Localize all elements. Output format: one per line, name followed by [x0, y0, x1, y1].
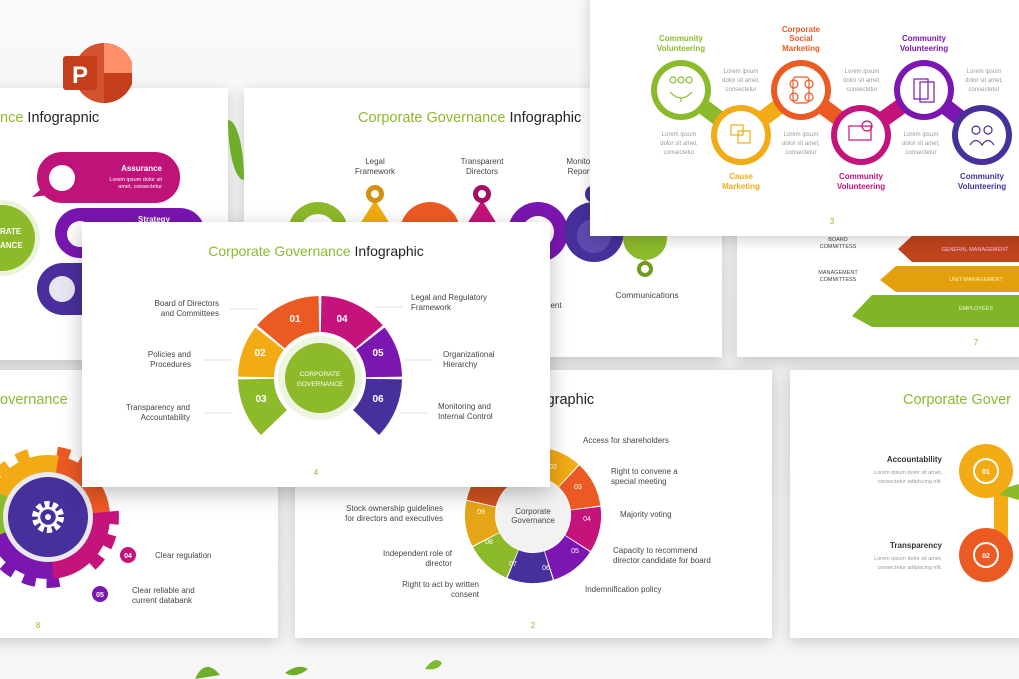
item: accountability: Accountability — [887, 455, 943, 464]
arrow: general management — [898, 236, 1019, 262]
item 05: 05 — [96, 592, 104, 599]
bubble: assurance: Assurance — [121, 164, 163, 173]
left labels: Right to act by written — [402, 580, 479, 589]
icon: powerpoint logo — [63, 43, 132, 103]
arrow: general management: GENERAL MANAGEMENT — [941, 247, 1009, 253]
item: accountability: consectetur adipiscing elit. — [877, 479, 942, 485]
right labels: Indemnification policy — [585, 585, 661, 594]
ring chart — [458, 440, 608, 590]
right labels: Internal Control — [438, 412, 493, 421]
labels: MANAGEMENT — [818, 270, 858, 276]
bubble: assurance: Lorem ipsum dolor sit — [109, 177, 162, 183]
labels: Legal — [365, 157, 385, 166]
half donut chart: 02 — [254, 348, 266, 359]
item: transparency: Lorem ipsum dolor sit amet, — [874, 556, 942, 562]
item: transparency: consectetur adipiscing elit. — [877, 565, 942, 571]
titles: Marketing — [782, 44, 820, 53]
titles: Cause — [729, 172, 754, 181]
half donut chart: GOVERNANCE — [297, 381, 344, 388]
lorem texts — [660, 69, 1003, 156]
ring numbers: 04 — [583, 516, 591, 523]
half donut chart: 06 — [372, 394, 384, 405]
chain shapes — [288, 185, 672, 277]
arrow: unit management — [880, 266, 1019, 292]
connector — [990, 480, 1019, 545]
titles: Community — [839, 172, 884, 181]
lorem texts: Lorem ipsum — [845, 69, 879, 75]
left labels: for directors and executives — [345, 514, 443, 523]
circle: corporate governance: ANCE — [0, 241, 23, 250]
ring numbers: 09 — [477, 509, 485, 516]
titles: Community — [659, 34, 704, 43]
left labels: Accountability — [141, 413, 190, 422]
half donut chart — [238, 296, 402, 435]
icons — [670, 77, 994, 145]
right labels — [583, 436, 711, 594]
right labels: Hierarchy — [443, 360, 477, 369]
right labels: Monitoring and — [438, 402, 491, 411]
left labels: Policies and — [148, 350, 191, 359]
lorem texts: Lorem ipsum — [904, 132, 938, 138]
ring numbers: 06 — [542, 565, 550, 572]
ring center text: Governance — [511, 516, 555, 525]
half donut chart: 05 — [372, 348, 384, 359]
slide: main slide 4 — [82, 222, 550, 487]
half donut chart: 04 — [336, 314, 348, 325]
ring numbers — [477, 464, 591, 572]
ring numbers: 07 — [509, 561, 517, 568]
lorem texts: consectetur — [846, 87, 878, 93]
circle 01: 01 — [982, 469, 990, 476]
circles — [651, 60, 1012, 165]
circle: corporate governance — [0, 200, 40, 276]
ring center text — [511, 507, 555, 525]
titles: Volunteering — [837, 182, 885, 191]
lorem texts: dolor sit amet, — [965, 78, 1003, 84]
title: nce Infographic — [495, 392, 594, 408]
lorem texts: dolor sit amet, — [660, 141, 698, 147]
titles: Social — [789, 34, 813, 43]
leaves: bottom — [195, 660, 442, 679]
title: nce Infograpnic — [0, 110, 99, 126]
right labels: Access for shareholders — [583, 436, 669, 445]
labels — [818, 237, 858, 283]
item 04: 04 — [124, 553, 132, 560]
lorem texts: Lorem ipsum — [662, 132, 696, 138]
titles: Marketing — [722, 182, 760, 191]
half donut chart: CORPORATE — [300, 371, 341, 378]
labels: Directors — [466, 167, 498, 176]
slide: left assurance slide — [0, 88, 228, 360]
left labels: Board of Directors — [155, 299, 219, 308]
ring numbers: 03 — [574, 484, 582, 491]
title: Corporate Gover — [903, 392, 1011, 408]
left labels: Procedures — [150, 360, 191, 369]
circle 02 — [959, 528, 1013, 582]
left labels: and Committees — [161, 309, 219, 318]
lorem texts: consectetur — [785, 150, 817, 156]
ring center text: Corporate — [515, 507, 551, 516]
half donut chart: 03 — [255, 394, 267, 405]
circle 02: 02 — [982, 553, 990, 560]
titles: Community — [902, 34, 947, 43]
title: Corporate Governance Infographic — [358, 110, 581, 126]
connector lines — [204, 307, 433, 413]
item: transparency: Transparency — [890, 541, 943, 550]
right labels: Organizational — [443, 350, 495, 359]
lorem texts: dolor sit amet, — [902, 141, 940, 147]
right labels: Legal and Regulatory — [411, 293, 487, 302]
lorem texts: dolor sit amet, — [843, 78, 881, 84]
lorem texts: consectetur — [663, 150, 695, 156]
title: Corporate Governance Infographic — [208, 243, 424, 259]
labels: COMMITTESS — [820, 277, 857, 283]
left labels: Independent role of — [383, 549, 453, 558]
item 04 — [120, 547, 211, 563]
page number: 3 — [830, 217, 835, 226]
slide: right accountability slide — [790, 370, 1019, 638]
right labels: Majority voting — [620, 510, 672, 519]
labels: Transparent — [461, 157, 504, 166]
lorem texts: Lorem ipsum — [967, 69, 1001, 75]
right labels — [411, 293, 495, 421]
labels: Framework — [355, 167, 396, 176]
page number: 7 — [974, 338, 979, 347]
right labels: director candidate for board — [613, 556, 711, 565]
left labels: Transparency and — [126, 403, 190, 412]
right labels: Capacity to recommend — [613, 546, 697, 555]
lorem texts: consectetur — [725, 87, 757, 93]
arrow: employees — [852, 295, 1019, 327]
item: transparency — [874, 541, 943, 571]
item 05: current databank — [132, 596, 193, 605]
right labels: Right to convene a — [611, 467, 678, 476]
left labels: director — [425, 559, 452, 568]
titles: Volunteering — [958, 182, 1006, 191]
item: accountability: Lorem ipsum dolor sit amet, — [874, 470, 942, 476]
half donut chart: 01 — [289, 314, 301, 325]
bubble: assurance — [32, 152, 180, 203]
left labels — [126, 299, 219, 422]
left labels: consent — [451, 590, 480, 599]
left labels — [345, 504, 480, 599]
slide: chain infographic (top middle) — [244, 88, 722, 357]
titles: Corporate — [782, 25, 821, 34]
arrow: employees: EMPLOYEES — [959, 306, 993, 312]
label: communications: Communications — [615, 290, 679, 300]
labels: COMMITTESS — [820, 244, 857, 250]
slide: gear slide 8 — [0, 370, 278, 638]
label: partial: ent — [550, 301, 562, 310]
right labels: special meeting — [611, 477, 667, 486]
item: accountability — [874, 455, 943, 485]
ring numbers: 08 — [485, 539, 493, 546]
bubble: assurance: amet, consectetur — [118, 184, 162, 190]
lorem texts: consectetur — [905, 150, 937, 156]
titles: Volunteering — [657, 44, 705, 53]
page number: 2 — [531, 621, 536, 630]
page number: 8 — [36, 621, 41, 630]
labels — [355, 157, 604, 176]
labels: Monitoring — [566, 157, 604, 166]
lorem texts: consectetur — [968, 87, 1000, 93]
connectors — [681, 90, 982, 135]
bubble: third — [37, 263, 137, 315]
arrow: unit management: UNIT MANAGEMENT — [949, 277, 1003, 283]
item 04: Clear regulation — [155, 551, 211, 560]
ring numbers: 02 — [549, 464, 557, 471]
bubble: strategy: Strategy — [138, 215, 171, 224]
titles: Volunteering — [900, 44, 948, 53]
item 05 — [92, 586, 195, 605]
labels: BOARD — [828, 237, 848, 243]
circle: corporate governance: RATE — [0, 227, 22, 236]
gear — [0, 432, 133, 602]
titles — [657, 25, 1006, 191]
left labels: Stock ownership guidelines — [346, 504, 443, 513]
circle 01 — [959, 444, 1013, 498]
labels: Reporting — [568, 167, 602, 176]
bubble: strategy — [55, 208, 205, 258]
lorem texts: Lorem ipsum — [784, 132, 818, 138]
right labels: Framework — [411, 303, 452, 312]
item 05: Clear reliable and — [132, 586, 195, 595]
icon: gear — [35, 504, 61, 530]
leaf: left of chain slide — [228, 120, 244, 180]
ring numbers: 05 — [571, 548, 579, 555]
lorem texts: dolor sit amet, — [782, 141, 820, 147]
title: overnance — [0, 392, 68, 408]
slide: slide 3 chain circles — [590, 0, 1019, 236]
lorem texts: Lorem ipsum — [724, 69, 758, 75]
slide: slide 7 hierarchy — [737, 200, 1019, 357]
icon: powerpoint logo: P — [72, 62, 88, 89]
titles: Community — [960, 172, 1005, 181]
lorem texts: dolor sit amet, — [722, 78, 760, 84]
page number: 4 — [314, 468, 319, 477]
slide: slide 2 ring — [295, 370, 772, 638]
